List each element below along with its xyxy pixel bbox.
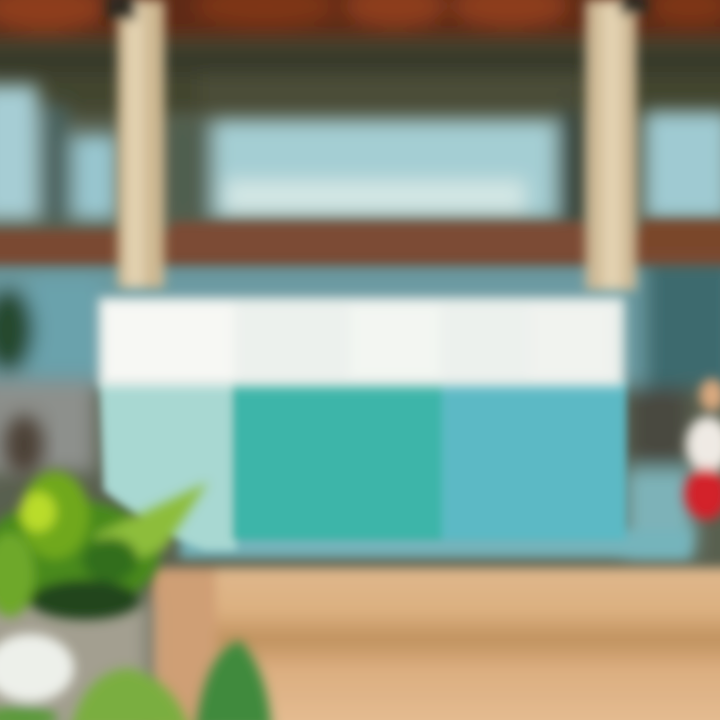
left foreground area: [0, 600, 150, 720]
figure: person in red and white: [684, 379, 720, 520]
roof: dark timber band: [0, 0, 720, 115]
counter front: aqua panels: [100, 380, 626, 550]
foreground plant: upper leaves: [0, 471, 208, 620]
counter base: [180, 530, 690, 558]
left post: [106, 0, 164, 288]
floor: wooden deck: [152, 568, 720, 720]
windows: pale blue glass: [0, 85, 720, 225]
counter top: white band: [99, 298, 624, 386]
foreground plant: lower leaves: [0, 634, 272, 720]
lower wall behind counter: [0, 262, 720, 556]
horizontal timber rail: [0, 220, 720, 264]
right post: [586, 0, 648, 290]
chair detail: [4, 415, 44, 475]
bar counter: [99, 298, 690, 558]
